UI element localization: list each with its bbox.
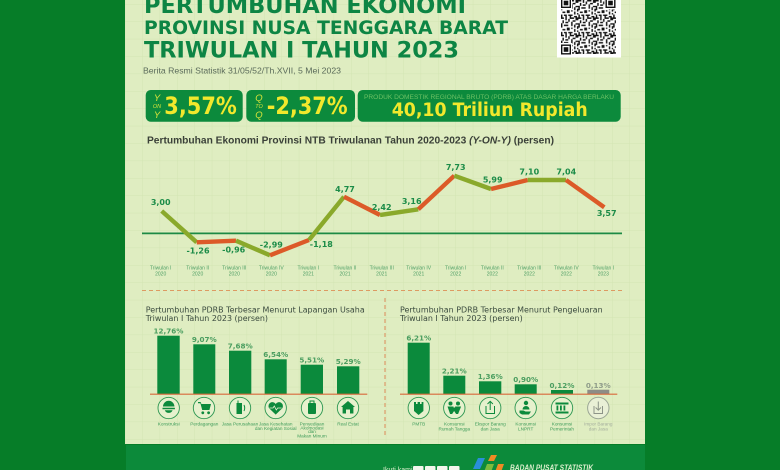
quarter labels: 2020 — [192, 272, 203, 278]
QR code — [557, 0, 621, 58]
data labels: 4,77 — [335, 185, 355, 194]
data labels: -1,18 — [310, 240, 333, 249]
stat label: Y-on-Y: ON — [153, 104, 161, 110]
footer band — [126, 445, 645, 470]
quarter labels — [150, 266, 614, 278]
bar values: 6,21% — [406, 334, 431, 342]
expenditure labels: LNPRT — [518, 426, 533, 432]
heading: bar chart by industry: Pertumbuhan PDRB Terbesar Menurut Lapangan Usaha — [146, 304, 365, 314]
quarter labels: Triwulan II — [481, 266, 504, 272]
stat label: PDRB: PRODUK DOMESTIK REGIONAL BRUTO (PDRB) ATAS DASAR HARGA BERLAKU — [364, 95, 614, 101]
quarter labels: 2020 — [155, 272, 166, 278]
icon: household consumption — [444, 397, 465, 419]
heading: bar chart by expenditure — [399, 304, 603, 323]
quarter labels: 2020 — [266, 272, 277, 278]
quarter labels: Triwulan III — [222, 266, 246, 272]
data labels: 2,42 — [372, 203, 392, 212]
stat label: Y-on-Y: Y — [154, 93, 161, 104]
industry labels: Perdagangan — [190, 422, 219, 426]
icon: export — [480, 397, 501, 419]
quarter labels: 2022 — [561, 272, 572, 278]
icon: construction helmet — [158, 397, 179, 419]
quarter labels: Triwulan IV — [554, 266, 579, 272]
data labels: 7,04 — [556, 168, 577, 177]
stat value: 3,57%: 3,57% — [164, 92, 237, 120]
quarter labels: 2022 — [524, 272, 535, 278]
expenditure labels: Pemerintah — [550, 426, 574, 432]
bar values: 0,90% — [513, 375, 538, 384]
quarter labels: 2023 — [598, 272, 609, 278]
quarter labels: Triwulan I — [445, 266, 466, 272]
expenditure labels — [412, 422, 613, 432]
quarter labels: 2022 — [487, 272, 498, 278]
quarter labels: Triwulan I — [298, 266, 319, 272]
quarter labels: Triwulan II — [186, 266, 209, 272]
quarter labels: Triwulan I — [150, 266, 171, 272]
heading: bar chart by industry: Triwulan I Tahun 2023 (persen) — [145, 313, 268, 323]
quarter labels: 2021 — [339, 272, 351, 278]
quarter labels: 2021 — [303, 272, 314, 278]
footer: BPS logo — [473, 455, 504, 470]
bar values: 9,07% — [192, 335, 217, 344]
title — [144, 0, 508, 64]
bar values: 5,51% — [299, 356, 324, 364]
industry labels: Makan Minum — [297, 434, 327, 438]
stat label: Q-to-Q: Q — [255, 93, 263, 104]
quarter labels: Triwulan IV — [406, 266, 432, 272]
quarter labels: 2020 — [229, 272, 240, 278]
stat label: Q-to-Q: Q — [255, 110, 263, 121]
icon: house — [337, 397, 359, 419]
stat: year on year — [146, 90, 243, 122]
industry labels — [158, 421, 360, 438]
industry labels: Jasa Perusahaan — [222, 422, 259, 426]
stat: PDRB — [358, 90, 621, 122]
data labels: 3,57 — [597, 209, 617, 218]
bar values: 7,68% — [228, 342, 253, 350]
quarter labels: Triwulan I — [593, 266, 614, 272]
bar values — [406, 334, 611, 390]
quarter labels: Triwulan IV — [259, 266, 284, 272]
bar values: 2,21% — [442, 366, 467, 376]
industry labels: Penyediaan — [300, 421, 325, 426]
bar chart: by expenditure — [400, 334, 617, 432]
icon: import — [588, 397, 609, 419]
icon: handheld radio — [229, 397, 251, 419]
expenditure labels: Impor Barang — [584, 422, 613, 426]
stat label: Q-to-Q: TO — [255, 104, 263, 110]
expenditure labels: Konsumsi — [444, 422, 465, 426]
stat value: -2,37%: -2,37% — [267, 92, 348, 120]
heading: bar chart by expenditure: Triwulan I Tahun 2023 (persen) — [399, 313, 523, 323]
expenditure labels: Konsumsi — [552, 422, 572, 426]
panel: background — [125, 0, 645, 444]
expenditure labels: Ekspor Barang — [475, 422, 506, 426]
industry labels: dan Kegiatan Sosial — [255, 426, 297, 431]
expenditure labels: dan Jasa — [589, 426, 608, 432]
quarter labels: 2021 — [376, 272, 387, 278]
data labels: -1,26 — [186, 246, 210, 255]
stat label: Y-on-Y: Y — [154, 110, 161, 121]
industry labels: Akomodasi — [300, 426, 324, 430]
bar values: 12,76% — [154, 326, 183, 336]
expenditure labels: PMTB — [412, 422, 425, 426]
bar values — [154, 326, 361, 366]
data labels: -2,99 — [260, 241, 283, 250]
data labels: 3,16 — [402, 197, 422, 206]
line chart — [142, 163, 622, 278]
stat label: Y-on-Y — [153, 93, 161, 121]
industry labels: Konstruksi — [158, 422, 180, 426]
heading: line chart: Pertumbuhan Ekonomi Provinsi NTB Triwulanan Tahun 2020-2023 (Y-ON-Y) (persen) — [147, 135, 554, 147]
expenditure labels: Rumah Tangga — [438, 426, 471, 432]
expenditure labels: dan Jasa — [481, 426, 500, 432]
icon: LNPRT consumption — [515, 397, 536, 419]
release reference: Berita Resmi Statistik 31/05/52/Th.XVII, 5 Mei 2023 — [143, 66, 341, 76]
bar values: 5,29% — [336, 357, 361, 366]
icon: suitcase — [301, 397, 323, 419]
stat value: 40,10 Triliun Rupiah: 40,10 Triliun Rupiah — [392, 100, 588, 121]
stat label: Q-to-Q — [255, 93, 263, 121]
bar values: 0,13% — [586, 381, 611, 390]
quarter labels: Triwulan III — [517, 266, 541, 272]
quarter labels: 2021 — [413, 272, 424, 278]
icon: heart — [265, 397, 286, 419]
title: TRIWULAN I TAHUN 2023 — [144, 38, 459, 64]
title: PROVINSI NUSA TENGGARA BARAT — [144, 17, 508, 39]
heading: bar chart by expenditure: Pertumbuhan PDRB Terbesar Menurut Pengeluaran — [400, 304, 603, 314]
industry labels: Jasa Kesehatan — [259, 422, 293, 426]
data labels: 7,73 — [446, 163, 466, 172]
expenditure labels: Konsumsi — [515, 422, 536, 426]
data labels: 7,10 — [519, 168, 540, 177]
bar values: 0,12% — [550, 381, 574, 390]
industry labels: dan — [308, 429, 316, 434]
quarter labels: 2022 — [450, 272, 461, 278]
data labels: 3,00 — [151, 198, 171, 207]
icon: government consumption — [551, 397, 573, 419]
icon: shopping cart — [193, 397, 215, 419]
industry labels: Real Estat — [337, 422, 360, 426]
icon: PMTB — [408, 397, 429, 419]
heading: bar chart by industry — [145, 304, 365, 323]
footer: social media icons — [413, 466, 460, 470]
stat: quarter to quarter — [246, 90, 355, 122]
data labels — [151, 163, 617, 255]
quarter labels: Triwulan II — [334, 266, 356, 272]
data labels: 5,99 — [483, 176, 503, 185]
bar chart: by industry — [150, 326, 367, 438]
bar values: 1,36% — [478, 372, 503, 381]
quarter labels: Triwulan III — [370, 266, 394, 272]
bar values: 6,54% — [263, 350, 288, 359]
data labels: -0,96 — [222, 246, 246, 254]
